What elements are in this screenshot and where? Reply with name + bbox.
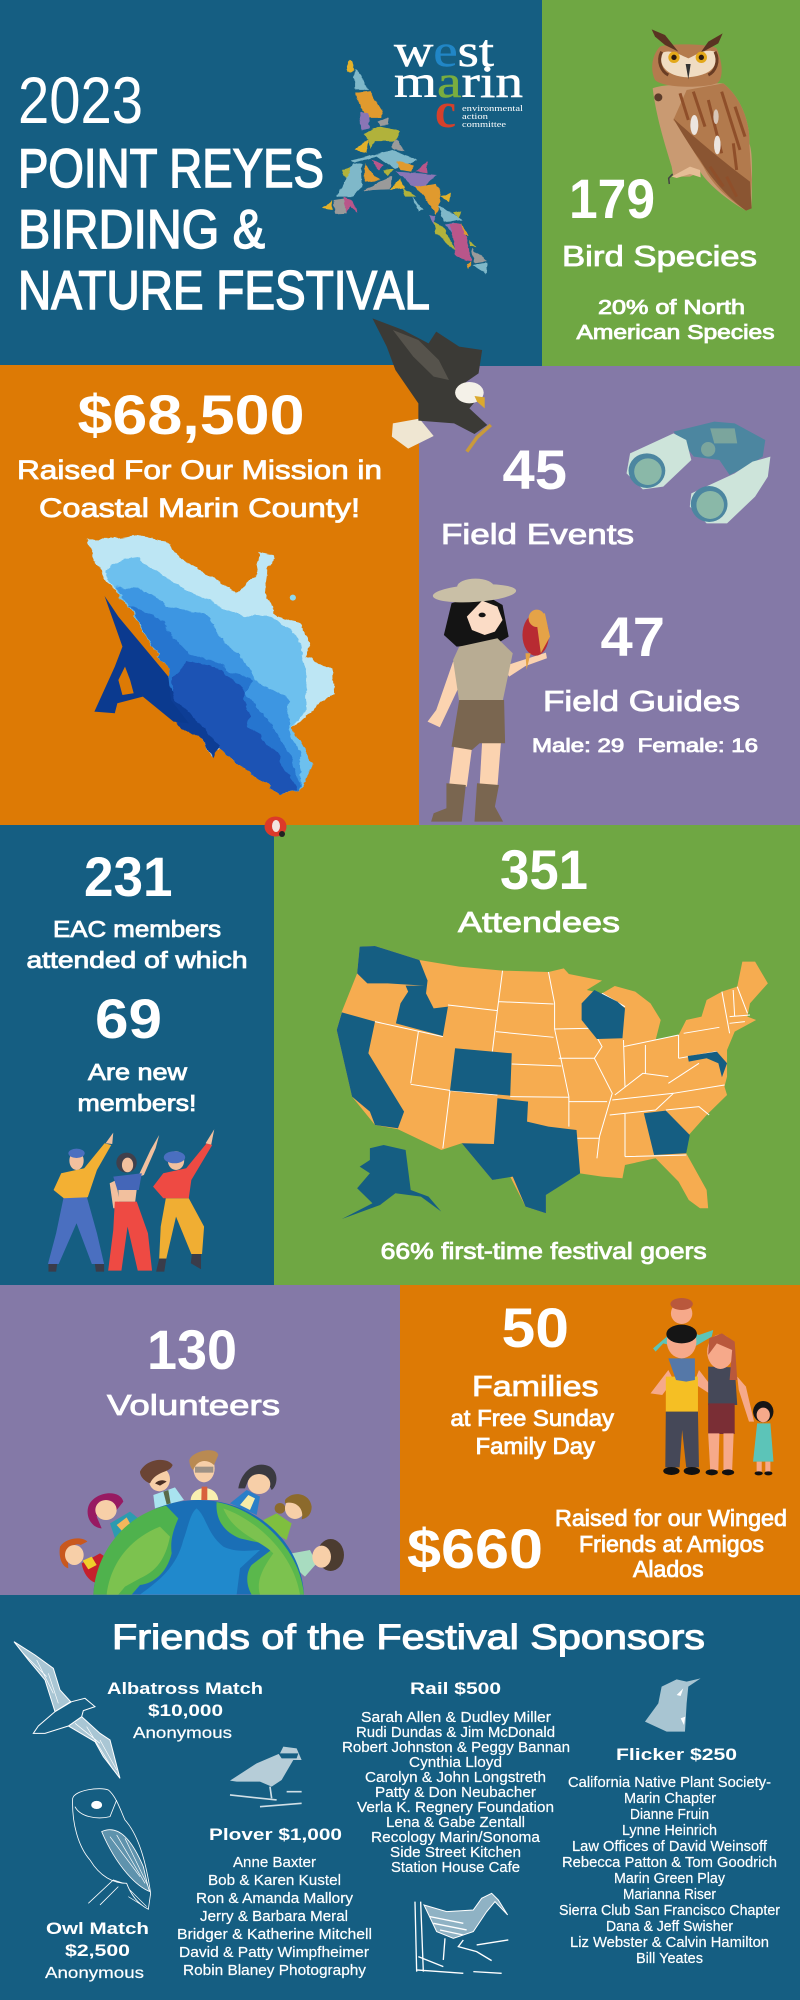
text: flicker sponsors: Marin Green Play <box>614 1871 726 1887</box>
text: free Sunday family day: at Free Sunday <box>450 1405 615 1431</box>
illustration: globe <box>93 1500 304 1595</box>
text: plover sponsors: David & Patty Wimpfheimer <box>179 1945 369 1961</box>
logo: West Marin Environmental Action Committee: committee <box>462 119 506 129</box>
text: rail sponsors: Verla K. Regnery Foundation <box>357 1800 554 1816</box>
text: EAC members attended: attended of which <box>26 947 248 973</box>
icon: eagle <box>372 318 491 452</box>
logo: West Marin Environmental Action Committee: marin <box>394 56 523 107</box>
heading: 2023: 2023 <box>18 63 143 137</box>
illustration: dancers <box>48 1129 214 1272</box>
text: albatross match <box>107 1679 263 1742</box>
text: flicker sponsors: Rebecca Patton & Tom Goodrich <box>562 1855 777 1871</box>
stat: 47: 47 <box>600 605 665 668</box>
text: plover sponsors: Robin Blaney Photography <box>183 1963 367 1979</box>
panel: bird species <box>542 0 800 366</box>
label: field events: Field Events <box>441 519 634 551</box>
text: EAC members attended <box>26 916 248 973</box>
stat: $660: $660 <box>407 1517 543 1580</box>
text: owl match <box>45 1919 149 1982</box>
text: plover sponsors: Bob & Karen Kustel <box>208 1873 341 1889</box>
text: raised for Amigos Alados <box>555 1505 787 1582</box>
label: bird species: Bird Species <box>562 241 757 273</box>
text: raised for Amigos Alados: Alados <box>633 1556 704 1582</box>
text: rail sponsors: Rudi Dundas & Jim McDonald <box>356 1725 555 1741</box>
text: flicker sponsors: Marin Chapter <box>624 1791 716 1807</box>
text: albatross match: Albatross Match <box>107 1679 263 1698</box>
text: flicker sponsors: Lynne Heinrich <box>622 1823 717 1839</box>
text: plover sponsors: Jerry & Barbara Meral <box>200 1909 348 1925</box>
text: flicker sponsors: Dana & Jeff Swisher <box>606 1919 733 1935</box>
text: flicker sponsors: Liz Webster & Calvin Hamilton <box>570 1935 769 1951</box>
sketch: rail <box>415 1893 508 1973</box>
logo: West Marin Environmental Action Committee: c <box>435 82 456 138</box>
text: rail sponsors: Patty & Don Neubacher <box>375 1785 536 1801</box>
text: flicker sponsors: Sierra Club San Francisco Chapter <box>559 1903 780 1919</box>
label: attendees: Attendees <box>458 907 620 939</box>
panel: festival sponsors <box>0 1595 800 2000</box>
illustration: people around globe <box>60 1450 344 1583</box>
text: rail sponsors: Robert Johnston & Peggy Bannan <box>342 1740 570 1756</box>
text: flicker sponsors: Law Offices of David Weinsoff <box>572 1839 768 1855</box>
map: US states of attendees <box>337 946 768 1219</box>
heading: friends of the festival sponsors: Friends of the Festival Sponsors <box>112 1618 705 1657</box>
text: EAC members attended: EAC members <box>53 916 221 942</box>
sketch: flicker <box>645 1678 701 1732</box>
text: male and female guides: Male: 29 Female: 16 <box>532 736 758 757</box>
text: rail sponsors: Sarah Allen & Dudley Miller <box>361 1710 551 1726</box>
illustration: family <box>651 1298 773 1475</box>
heading: festival name: BIRDING & <box>18 198 265 260</box>
icon: Point Reyes shape made of bird silhouettes <box>322 60 487 273</box>
text: plover sponsors: Ron & Amanda Mallory <box>196 1891 354 1907</box>
logo: West Marin Environmental Action Committee: action <box>462 111 489 121</box>
text: rail sponsors: Recology Marin/Sonoma <box>371 1830 541 1846</box>
text: rail sponsors: Cynthia Lloyd <box>409 1755 502 1771</box>
text: flicker sponsors: Bill Yeates <box>636 1951 703 1967</box>
sketch: owl <box>73 1789 151 1909</box>
text: owl match: $2,500 <box>65 1941 130 1960</box>
icon: ladybug <box>264 816 286 837</box>
heading: festival name <box>18 137 430 321</box>
stat: 351: 351 <box>500 838 588 901</box>
text: first-time festival goers: 66% first-time festival goers <box>381 1238 707 1264</box>
panel: EAC members <box>0 825 274 1285</box>
text: flicker sponsors: California Native Plant Society- <box>568 1775 771 1791</box>
text: albatross match: Anonymous <box>133 1725 232 1742</box>
text: raised for Amigos Alados: Raised for our Winged <box>555 1505 787 1531</box>
text: plover sponsors <box>177 1825 372 1979</box>
text: are new members: Are new <box>88 1059 187 1085</box>
sketch: plover <box>230 1747 302 1807</box>
text: raised for our mission: Raised For Our Mission in <box>17 455 382 485</box>
stat: 50: 50 <box>502 1296 569 1359</box>
text: owl match: Owl Match <box>46 1919 149 1938</box>
text: albatross match: $10,000 <box>148 1701 223 1720</box>
text: rail sponsors: Lena & Gabe Zentall <box>386 1815 525 1831</box>
text: rail sponsors: Side Street Kitchen <box>390 1845 521 1861</box>
text: rail sponsors: Carolyn & John Longstreth <box>365 1770 546 1786</box>
stat: 130: 130 <box>147 1318 237 1381</box>
text: are new members: members! <box>78 1090 196 1116</box>
text: flicker sponsors: Dianne Fruin <box>630 1807 709 1823</box>
stat: 231: 231 <box>84 845 172 908</box>
text: plover sponsors: Plover $1,000 <box>209 1825 342 1844</box>
stat: 45: 45 <box>502 438 567 501</box>
text: share of North American species: American Species <box>576 322 774 344</box>
panel: festival title header <box>0 0 542 366</box>
text: free Sunday family day <box>450 1405 615 1459</box>
text: rail sponsors: Station House Cafe <box>391 1860 520 1876</box>
logo: West Marin Environmental Action Committee: environmental <box>462 103 524 113</box>
panel: volunteers <box>0 1285 400 1595</box>
sketch: albatross <box>14 1642 120 1778</box>
panel: attendees <box>274 825 800 1285</box>
label: field guides: Field Guides <box>543 686 740 718</box>
stat: 69: 69 <box>95 987 162 1050</box>
panel: field events and guides <box>419 366 800 825</box>
illustration: ranger with parrot <box>428 579 550 822</box>
text: share of North American species: 20% of North <box>598 297 745 319</box>
text: share of North American species <box>576 297 774 344</box>
stat: $68,500: $68,500 <box>78 383 304 446</box>
logo: West Marin Environmental Action Committee: west <box>394 25 494 76</box>
panel: families and Amigos Alados <box>400 1285 800 1595</box>
text: flicker sponsors <box>559 1745 780 1967</box>
text: raised for our mission <box>17 455 382 523</box>
text: free Sunday family day: Family Day <box>476 1433 596 1459</box>
map: Marin County watercolor <box>86 535 333 795</box>
text: plover sponsors: Anne Baxter <box>233 1855 316 1871</box>
text: flicker sponsors: Marianna Riser <box>623 1887 716 1903</box>
text: raised for our mission: Coastal Marin County! <box>39 493 360 523</box>
label: families: Families <box>472 1371 598 1403</box>
stat: 179: 179 <box>569 167 655 230</box>
text: rail sponsors <box>342 1679 570 1876</box>
icon: binoculars <box>627 422 770 523</box>
text: rail sponsors: Rail $500 <box>410 1679 501 1698</box>
label: volunteers: Volunteers <box>107 1390 280 1422</box>
heading: festival name: NATURE FESTIVAL <box>18 259 430 321</box>
text: plover sponsors: Bridger & Katherine Mitchell <box>177 1927 372 1943</box>
text: raised for Amigos Alados: Friends at Amigos <box>579 1531 764 1557</box>
heading: festival name: POINT REYES <box>18 137 324 199</box>
text: owl match: Anonymous <box>45 1965 144 1982</box>
text: flicker sponsors: Flicker $250 <box>616 1745 737 1764</box>
panel: funds raised <box>0 365 419 825</box>
logo: West Marin Environmental Action Committee <box>394 25 524 138</box>
icon: owl <box>652 29 752 211</box>
text: are new members <box>78 1059 196 1116</box>
